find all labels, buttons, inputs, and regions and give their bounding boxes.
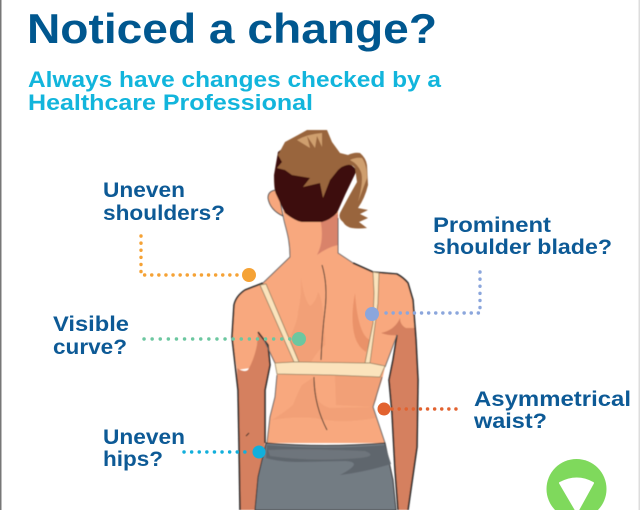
left arm: [237, 332, 270, 510]
callout: asymmetrical waist: Asymmetrical: [474, 388, 631, 411]
callout: uneven shoulders: Uneven: [103, 179, 185, 202]
illustration: woman's back: [232, 130, 418, 510]
bra straps and band: [260, 272, 385, 377]
callout: visible curve: curve?: [53, 336, 127, 359]
callout: uneven hips: hips?: [103, 448, 163, 471]
callout: visible curve: [53, 313, 306, 359]
callout: prominent shoulder blade: Prominent: [433, 214, 551, 237]
callout: asymmetrical waist: waist?: [473, 410, 547, 433]
subtitle: Healthcare Professional: [28, 90, 313, 115]
logo: green ribbon mark: [546, 459, 606, 510]
skirt: [255, 443, 396, 510]
neck shadow: [317, 214, 338, 255]
body outlines: [232, 263, 418, 510]
callout: asymmetrical waist: [378, 388, 631, 433]
subtitle: [28, 67, 442, 115]
subtitle: Always have changes checked by a: [28, 67, 442, 92]
ear: [268, 190, 283, 216]
torso and shoulders: [232, 210, 416, 443]
callout: prominent shoulder blade: [365, 214, 612, 321]
callout: visible curve: Visible: [53, 313, 129, 336]
back shading: [272, 277, 381, 421]
title: Noticed a change?: [27, 5, 437, 52]
callout: prominent shoulder blade: shoulder blade?: [433, 236, 612, 259]
callout: uneven shoulders: [103, 179, 256, 282]
right arm: [381, 318, 418, 510]
callout: uneven shoulders: shoulders?: [103, 202, 225, 225]
callout: uneven hips: [103, 426, 266, 471]
hair: [274, 130, 368, 228]
callout: uneven hips: Uneven: [103, 426, 185, 449]
